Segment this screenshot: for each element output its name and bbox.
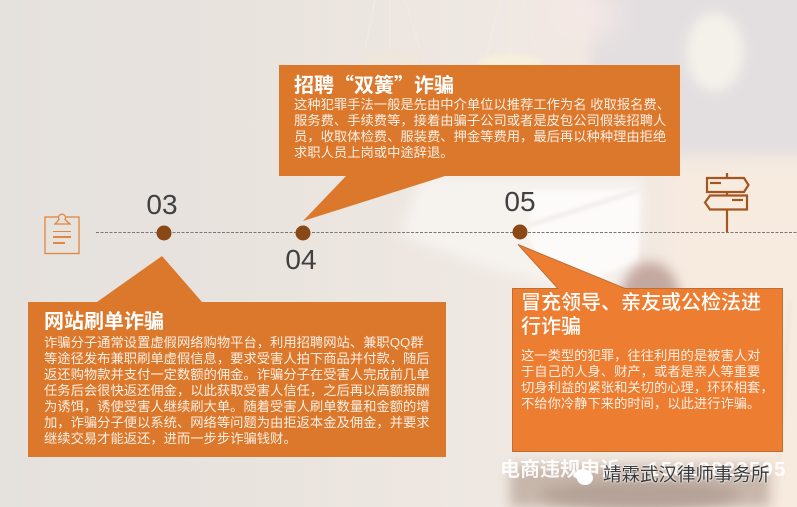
body text: 这一类型的犯罪，往往利用的是被害人对 (521, 348, 760, 363)
body text: 诈骗分子通常设置虚假网络购物平台，利用招聘网站、兼职QQ群 (44, 335, 424, 350)
heading: 行诈骗 (521, 316, 581, 338)
body text: 员，收取体检费、服装费、押金等费用，最后再以种种理由拒绝 (294, 129, 666, 144)
panel: fake order scam (28, 256, 446, 457)
body text: 继续交易才能返还，进而一步步诈骗钱财。 (44, 431, 297, 446)
icon: clipboard (44, 214, 80, 254)
body text (294, 97, 670, 160)
body text: 求职人员上岗或中途辞退。 (294, 145, 454, 160)
number 05: 05 (504, 186, 536, 217)
heading (521, 292, 761, 338)
watermark: law firm name: 靖霖武汉律师事务所 (603, 464, 770, 485)
heading: 冒充领导、亲友或公检法进 (521, 292, 761, 314)
watermark: phone notice: 15813828595 (648, 459, 787, 481)
body text: 任务后会很快返还佣金，以此获取受害人信任，之后再以高额报酬 (44, 383, 430, 398)
body text: 这种犯罪手法一般是先由中介单位以推荐工作为名 收取报名费、 (294, 97, 670, 112)
panel: recruitment scam (279, 65, 680, 221)
icon: chat bubble (575, 469, 593, 485)
body text: 为诱饵，诱使受害人继续刷大单。随着受害人刷单数量和金额的增 (44, 399, 430, 414)
icon: signpost (704, 173, 750, 232)
body text: 切身利益的紧张和关切的心理，环环相套， (521, 380, 774, 395)
number 04: 04 (285, 244, 317, 275)
body text: 加，诈骗分子便以系统、网络等问题为由拒返本金及佣金，并要求 (44, 415, 430, 430)
body text: 不给你冷静下来的时间，以此进行诈骗。 (521, 396, 760, 411)
body text: 返还购物款并支付一定数额的佣金。诈骗分子在受害人完成前几单 (44, 367, 430, 382)
watermark: phone notice (500, 458, 787, 481)
watermark: phone notice: 电商违规申诉 (500, 459, 620, 481)
heading: 网站刷单诈骗 (44, 311, 164, 333)
heading: 招聘“双簧”诈骗 (294, 69, 454, 98)
body text: 服务费、手续费等，接着由骗子公司或者是皮包公司假装招聘人 (294, 113, 666, 128)
body text: 等途径发布兼职刷单虚假信息，要求受害人拍下商品并付款，随后 (44, 351, 430, 366)
body text (44, 335, 430, 446)
number 03: 03 (146, 189, 178, 220)
panel: impersonation scam (512, 244, 783, 452)
body text: 于自己的人身、财产，或者是亲人等重要 (521, 364, 760, 379)
body text (521, 348, 774, 411)
